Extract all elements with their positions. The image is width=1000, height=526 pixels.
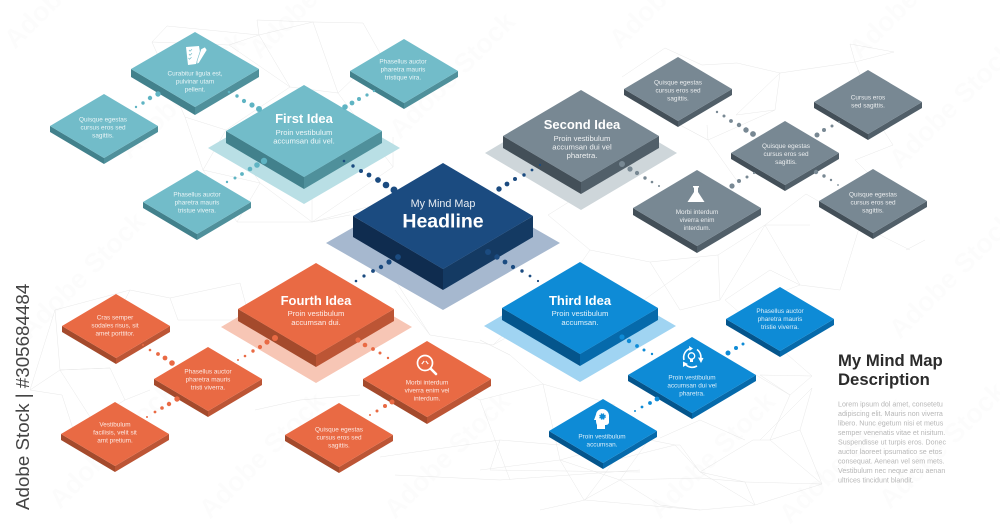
block: quisque left: sagittis.: [92, 133, 114, 140]
block: cras: [62, 294, 170, 364]
block: phasellus blue: [726, 287, 834, 357]
block: curabitur: pellent.: [185, 86, 206, 94]
block: first idea: First Idea: [275, 111, 334, 126]
block: cras: amet porttitor.: [95, 330, 135, 337]
heading: description title: Description: [838, 370, 930, 389]
block: phasellus blue: tristie viverra.: [761, 324, 799, 331]
block: phasellus top right: tristique vira.: [385, 74, 421, 82]
watermark pattern: Adobe Stock: [43, 376, 182, 514]
block: phasellus bottom: Phasellus auctor: [173, 192, 221, 199]
block: curabitur: [131, 32, 259, 115]
block: cursus: sed sagittis.: [851, 102, 885, 109]
block: quisque middle: [731, 121, 839, 191]
block: quisque right: Quisque egestas: [849, 192, 897, 199]
block: first idea: accumsan dui vel.: [273, 136, 335, 146]
block: quisque middle: cursus eros sed: [763, 151, 809, 158]
block: quisque right: cursus eros sed: [850, 200, 896, 207]
block: proin bottom: Proin vestibulum: [578, 433, 626, 440]
block: headline: My Mind Map: [411, 198, 475, 210]
block: fourth idea: accumsan dui.: [291, 318, 341, 327]
block: proin middle: Proin vestibulum: [668, 374, 716, 381]
block: quisque top: [624, 57, 732, 127]
block: phasellus orange: Phasellus auctor: [184, 369, 232, 376]
block: quisque top: cursus eros sed: [655, 88, 701, 95]
block: fourth idea: [238, 263, 394, 367]
block: morbi orange: interdum.: [414, 396, 441, 403]
block: phasellus top right: Phasellus auctor: [379, 58, 427, 66]
text block: description body: ultrices tincidunt blandit.: [838, 476, 914, 484]
watermark pattern: Adobe Stock: [378, 386, 517, 524]
block: phasellus top right: [350, 39, 458, 109]
block: headline: Headline: [402, 210, 484, 232]
block: third idea: [502, 262, 658, 366]
text block: description body: [838, 400, 946, 484]
icon: magnifier with chart: [418, 356, 436, 374]
block: morbi orange: Morbi interdum: [406, 380, 448, 387]
block: phasellus orange: [154, 347, 262, 417]
block: cras: Cras semper: [97, 314, 134, 321]
heading: description title: My Mind Map: [838, 351, 943, 370]
headline shadow: [326, 176, 560, 310]
dots: navy connectors: [343, 160, 541, 282]
block: headline: [353, 163, 533, 290]
block: quisque orange: sagittis.: [328, 443, 350, 450]
block: second idea: accumsan dui vel: [552, 142, 612, 152]
block: quisque left: cursus eros sed: [80, 125, 126, 132]
watermark pattern: Adobe Stock: [773, 391, 912, 526]
block: cursus: [814, 70, 922, 140]
text block: description body: semper venenatis vitae et nisitum.: [838, 429, 945, 437]
panel: first idea branch: [50, 32, 458, 240]
dots: blue connectors: [619, 334, 744, 412]
icon: flask: [688, 180, 704, 202]
block: vestibulum: [61, 402, 169, 472]
panel: second idea branch: [485, 57, 927, 253]
block: phasellus bottom: [143, 170, 251, 240]
text block: description body: auctor laoreet ipsumatico se etos: [838, 448, 943, 456]
block: phasellus orange: pharetra mauris: [186, 377, 230, 384]
block: second idea: Second Idea: [544, 117, 621, 132]
block: morbi grey: [633, 170, 761, 253]
block: quisque orange: Quisque egestas: [315, 427, 363, 434]
watermark pattern: Adobe Stock: [113, 26, 252, 164]
heading: description title: [838, 351, 943, 389]
block: cras: sodales risus, sit: [91, 322, 139, 329]
block: phasellus bottom: tristue vivera.: [178, 208, 216, 215]
block: vestibulum: amt pretium.: [97, 437, 133, 444]
block: morbi grey: interdum.: [684, 225, 711, 232]
block: curabitur: Curabitur ligula est,: [167, 70, 223, 78]
block: second idea: [503, 90, 659, 194]
watermark pattern: Adobe Stock: [193, 386, 332, 524]
text block: description body: Suspendisse ut turpis eros. Donec: [838, 438, 946, 446]
dots: grey connectors: [619, 111, 840, 189]
text block: description body: libero. Nunc egetum nisi et metus: [838, 420, 944, 428]
block: quisque orange: cursus eros sed: [316, 435, 362, 442]
block: second idea: Proin vestibulum: [554, 134, 610, 143]
block: quisque right: [819, 169, 927, 239]
panel: fourth idea branch: [61, 263, 491, 473]
block: morbi grey: viverra enim: [680, 217, 714, 224]
block: third idea: accumsan.: [561, 318, 599, 327]
block: phasellus blue: pharetra mauris: [758, 316, 802, 323]
block: curabitur: pulvinar utam: [176, 78, 214, 86]
block: fourth idea: Fourth Idea: [281, 293, 352, 308]
block: first idea: Proin vestibulum: [276, 128, 332, 137]
block: morbi orange: viverra enim vel: [405, 388, 449, 395]
second idea shadow: [485, 96, 677, 210]
block: quisque top: Quisque egestas: [654, 80, 702, 87]
fourth idea shadow: [221, 271, 412, 383]
dots: orange connectors: [142, 335, 394, 418]
block: morbi orange: [363, 341, 491, 424]
dots: teal connectors: [135, 90, 375, 183]
watermark pattern: Adobe Stock: [13, 206, 152, 344]
text block: description body: Lorem ipsum dol amet, consetetu: [838, 400, 943, 408]
text block: description body: Vestibulum nec neque arcu aenan: [838, 467, 945, 475]
block: phasellus orange: tristi viverra.: [191, 385, 225, 392]
block: cursus: Cursus eros: [851, 94, 885, 101]
block: quisque middle: sagittis.: [775, 159, 797, 166]
block: first idea: [226, 85, 382, 189]
block: proin bottom: [549, 399, 657, 469]
text block: description body: consequat. Aenean vel sem mets.: [838, 458, 944, 466]
block: quisque middle: Quisque egestas: [762, 143, 810, 150]
icon: notes and pen: [186, 46, 207, 65]
block: quisque right: sagittis.: [862, 208, 884, 215]
panel: central headline: [326, 160, 560, 310]
block: third idea: Proin vestibulum: [552, 309, 608, 318]
icon: head with gear: [594, 409, 609, 429]
block: second idea: pharetra.: [567, 151, 597, 160]
side label: stock id: Adobe Stock | #305684484: [12, 284, 33, 510]
watermark pattern: Adobe Stock: [643, 386, 782, 524]
block: phasellus blue: Phasellus auctor: [756, 308, 804, 315]
block: quisque left: Quisque egestas: [79, 117, 127, 124]
block: phasellus top right: pharetra mauris: [381, 66, 425, 74]
block: proin middle: accumsan dui vel: [667, 382, 717, 389]
text block: description body: adipiscing elit. Mauris non viverra: [838, 410, 943, 418]
first idea shadow: [208, 92, 400, 204]
block: vestibulum: facilisis, velit sit: [93, 429, 137, 436]
block: proin middle: pharetra.: [679, 390, 705, 397]
watermark pattern: Adobe Stock: [383, 6, 522, 144]
third idea shadow: [484, 270, 676, 382]
block: proin middle: [628, 337, 756, 419]
panel: third idea branch: [484, 262, 834, 469]
block: vestibulum: Vestibulum: [99, 421, 131, 428]
block: quisque left: [50, 94, 158, 164]
block: proin bottom: accumsan.: [587, 441, 618, 448]
block: phasellus bottom: pharetra mauris: [175, 200, 219, 207]
icon: cycle with light bulb: [683, 346, 704, 367]
block: third idea: Third Idea: [549, 293, 612, 308]
block: morbi grey: Morbi interdum: [676, 209, 718, 216]
block: quisque orange: [285, 403, 393, 473]
block: quisque top: sagittis.: [667, 96, 689, 103]
block: fourth idea: Proin vestibulum: [288, 309, 344, 318]
